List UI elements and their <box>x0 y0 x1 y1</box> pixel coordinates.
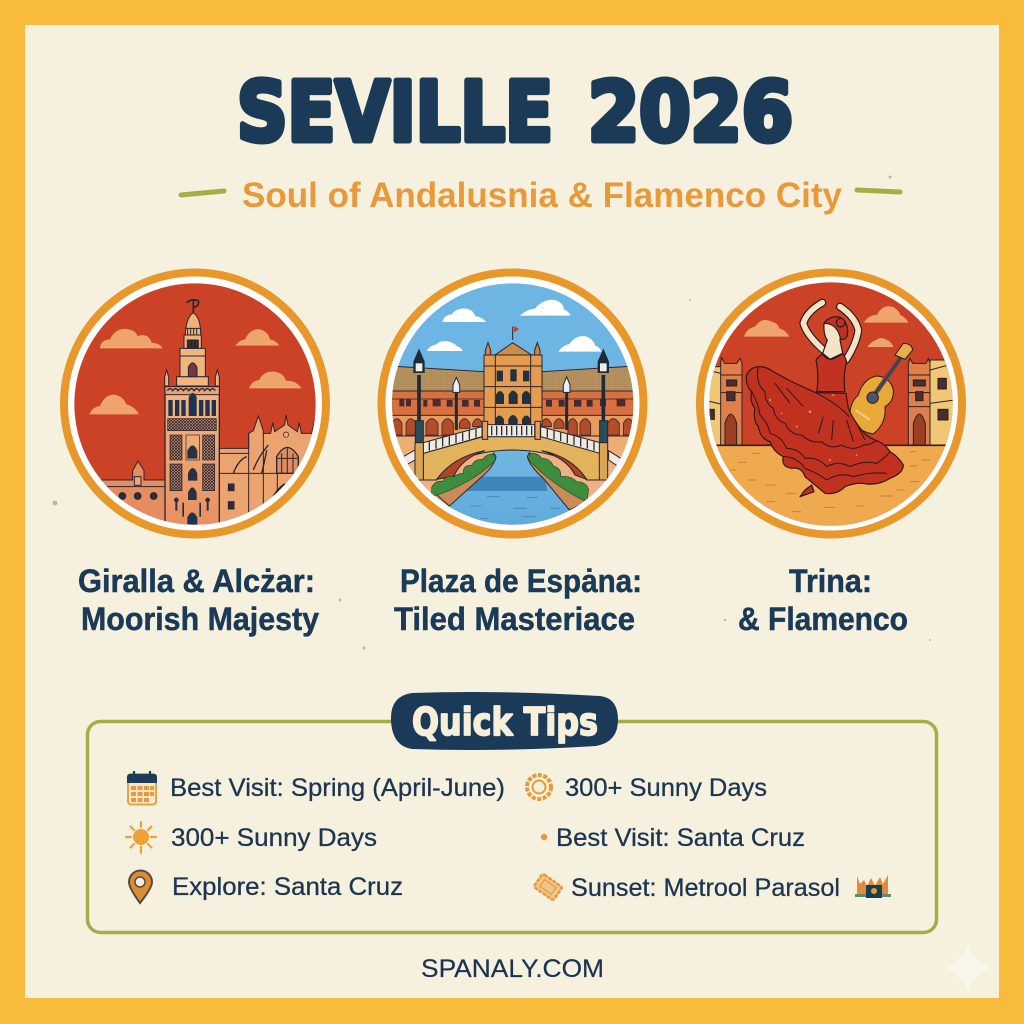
panel: Giralda illustration <box>64 272 326 534</box>
icon: Metropol Parasol and camera <box>855 875 891 898</box>
tip: sunset: Sunset: Metrool Parasol <box>571 874 840 902</box>
icon: map pin <box>129 871 152 903</box>
buildings <box>707 357 957 445</box>
paper specks <box>52 176 931 922</box>
panel: Plaza de Espana illustration <box>382 272 644 534</box>
quick tips badge: Quick Tips <box>412 700 598 744</box>
icon: bullet <box>541 834 547 840</box>
tip: best visit santa cruz: Best Visit: Santa Cruz <box>556 824 805 852</box>
main tower <box>165 387 219 527</box>
label: Giralla: Giralla & Alcżar: <box>78 563 315 599</box>
subtitle with accent strokes <box>181 176 900 215</box>
panel: flamenco illustration <box>700 272 962 534</box>
bridge <box>403 421 621 480</box>
panel: quick tips <box>88 692 936 932</box>
scene: flamenco dancer and guitar <box>707 280 960 533</box>
tip: best visit spring: Best Visit: Spring (April-June) <box>170 774 505 802</box>
sparkle watermark <box>944 944 992 992</box>
flamenco skirt <box>746 367 903 494</box>
title: SEVILLE <box>237 66 553 160</box>
tip: sunny days right: 300+ Sunny Days <box>565 774 767 802</box>
scene: Giralda tower and cathedral <box>70 280 323 533</box>
dancer <box>746 303 903 497</box>
icon: sun medallion <box>527 775 551 799</box>
right cathedral <box>219 415 318 527</box>
tip: explore: Explore: Santa Cruz <box>172 873 403 901</box>
icon: sun <box>126 822 156 853</box>
label: Giralla: Moorish Majesty <box>81 601 319 637</box>
tip: sunny days left: 300+ Sunny Days <box>171 824 377 852</box>
label: Plaza: Tiled Masteriace <box>394 601 635 637</box>
icon: ticket <box>534 874 562 900</box>
scene: plaza, bridge and canal <box>387 280 640 533</box>
icon: calendar <box>127 771 157 804</box>
left wing <box>100 461 165 527</box>
small lamps <box>453 377 570 430</box>
footer website: SPANALY.COM <box>421 955 604 983</box>
label: Plaza: Plaza de Espȧna: <box>400 563 642 599</box>
canal banks and hedges <box>437 453 496 506</box>
large lamps <box>414 349 609 480</box>
central pavilion <box>484 326 542 425</box>
banks and water <box>402 452 624 525</box>
quick tips badge <box>391 692 618 750</box>
title: 2026 <box>588 66 793 160</box>
label: Trina: & Flamenco <box>738 601 908 637</box>
guitar <box>850 343 913 434</box>
plaza ground <box>716 446 946 526</box>
label: Trina: Trina: <box>789 563 872 599</box>
torso and head <box>823 322 843 359</box>
subtitle text: Soul of Andalusnia & Flamenco City <box>242 176 843 215</box>
